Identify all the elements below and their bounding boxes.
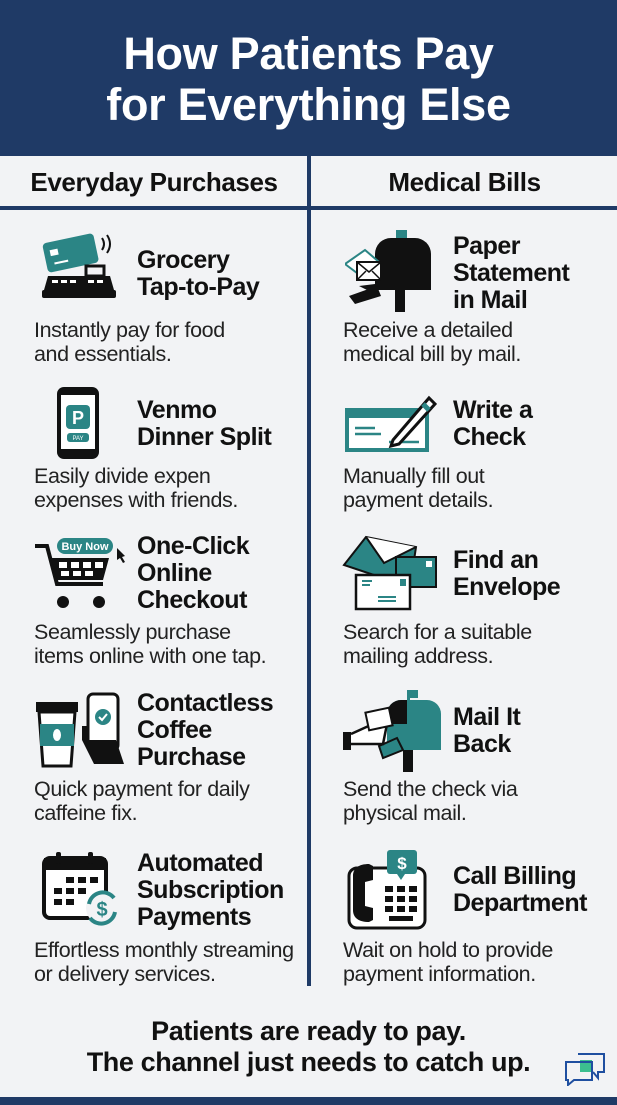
item title: write check: Check — [453, 423, 526, 451]
item title: mail it back — [453, 703, 521, 758]
item desc: envelope — [343, 620, 532, 668]
item title: write check — [453, 396, 534, 451]
item title: coffee — [137, 689, 273, 771]
item title: mail it back: Mail It — [453, 703, 520, 731]
icon: phone P: PAY — [72, 436, 84, 442]
item desc: grocery — [34, 318, 225, 366]
item desc: venmo: Easily divide expen — [34, 464, 210, 488]
icon: phone P: P — [72, 408, 84, 428]
title: How Patients Pay — [123, 28, 494, 79]
item title: venmo — [137, 396, 272, 451]
item title: paper statement — [453, 232, 570, 314]
item desc: call billing: payment information. — [343, 962, 536, 986]
item desc: venmo: expenses with friends. — [34, 488, 238, 512]
item desc: online checkout — [34, 620, 266, 668]
item desc: paper statement: Receive a detailed — [343, 318, 513, 342]
item title: grocery — [137, 246, 260, 301]
item title: paper statement: in Mail — [453, 286, 527, 314]
item desc: envelope: mailing address. — [343, 644, 493, 668]
item desc: grocery: Instantly pay for food — [34, 318, 225, 342]
item title: subscription — [137, 849, 284, 931]
item title: subscription: Payments — [137, 903, 251, 931]
item title: envelope: Find an — [453, 546, 538, 574]
item desc: mail it back: Send the check via — [343, 777, 517, 801]
icon: cart buy now — [35, 538, 125, 608]
item desc: venmo — [34, 464, 238, 512]
item title: coffee: Purchase — [137, 743, 246, 771]
item desc: online checkout: Seamlessly purchase — [34, 620, 231, 644]
item desc: subscription — [34, 938, 294, 986]
item title: venmo: Dinner Split — [137, 423, 271, 451]
item desc: mail it back — [343, 777, 518, 824]
footer message — [87, 1016, 530, 1077]
icon: mailbox — [345, 230, 431, 312]
icon: chat bubbles — [565, 1053, 605, 1086]
item desc: write check: payment details. — [343, 488, 493, 512]
icon: coffee and phone — [36, 692, 124, 768]
item title: grocery: Grocery — [137, 246, 229, 274]
item desc: call billing — [343, 938, 553, 986]
item desc: grocery: and essentials. — [34, 342, 171, 366]
icon: hand mailbox — [343, 690, 441, 772]
column headers — [30, 167, 541, 197]
footer message: The channel just needs to catch up. — [87, 1047, 530, 1077]
item title: envelope: Envelope — [453, 573, 560, 601]
item title: online checkout: One-Click — [137, 532, 249, 560]
item title: subscription: Subscription — [137, 876, 284, 904]
item desc: write check — [343, 464, 493, 512]
item title: mail it back: Back — [453, 730, 511, 758]
title — [106, 28, 511, 130]
bottom bar — [0, 1097, 617, 1105]
item desc: paper statement — [343, 318, 521, 366]
item title: online checkout — [137, 532, 250, 614]
item desc: coffee: Quick payment for daily — [34, 777, 249, 801]
title: for Everything Else — [106, 79, 511, 130]
icon: phone billing: $ — [397, 854, 407, 873]
item title: grocery: Tap-to-Pay — [137, 273, 259, 301]
panel: medical bills — [342, 230, 588, 986]
item title: write check: Write a — [453, 396, 532, 424]
item desc: coffee — [34, 777, 250, 824]
item desc: coffee: caffeine fix. — [34, 800, 137, 824]
item title: online checkout: Online — [137, 559, 212, 587]
item desc: mail it back: physical mail. — [343, 800, 466, 824]
item desc: subscription: Effortless monthly streaming — [34, 938, 294, 962]
item title: call billing: Department — [453, 889, 587, 917]
heading: medical bills: Medical Bills — [388, 167, 541, 197]
item title: coffee: Contactless — [137, 689, 273, 717]
icon: card and register — [42, 234, 116, 298]
item desc: write check: Manually fill out — [343, 464, 484, 488]
item title: subscription: Automated — [137, 849, 263, 877]
icon: envelopes — [342, 536, 437, 610]
icon: check and pen — [345, 396, 437, 452]
item title: venmo: Venmo — [137, 396, 216, 424]
heading: everyday purchases: Everyday Purchases — [30, 167, 278, 197]
item desc: paper statement: medical bill by mail. — [343, 342, 521, 366]
icon: calendar: $ — [96, 899, 108, 921]
item desc: call billing: Wait on hold to provide — [343, 938, 553, 962]
item title: paper statement: Statement — [453, 259, 569, 287]
icon: cart buy now: Buy Now — [61, 541, 109, 553]
item title: call billing — [453, 862, 588, 917]
header — [0, 0, 617, 156]
item title: envelope — [453, 546, 560, 601]
icon: phone P — [57, 387, 99, 459]
icon: phone billing — [348, 850, 426, 930]
item title: coffee: Coffee — [137, 716, 212, 744]
panel: everyday purchases — [34, 234, 294, 986]
item title: paper statement: Paper — [453, 232, 520, 260]
item desc: online checkout: items online with one tap. — [34, 644, 266, 668]
item desc: envelope: Search for a suitable — [343, 620, 532, 644]
footer message: Patients are ready to pay. — [151, 1016, 466, 1046]
item title: call billing: Call Billing — [453, 862, 576, 890]
icon: calendar — [42, 852, 117, 926]
item title: online checkout: Checkout — [137, 586, 247, 614]
item desc: subscription: or delivery services. — [34, 962, 216, 986]
